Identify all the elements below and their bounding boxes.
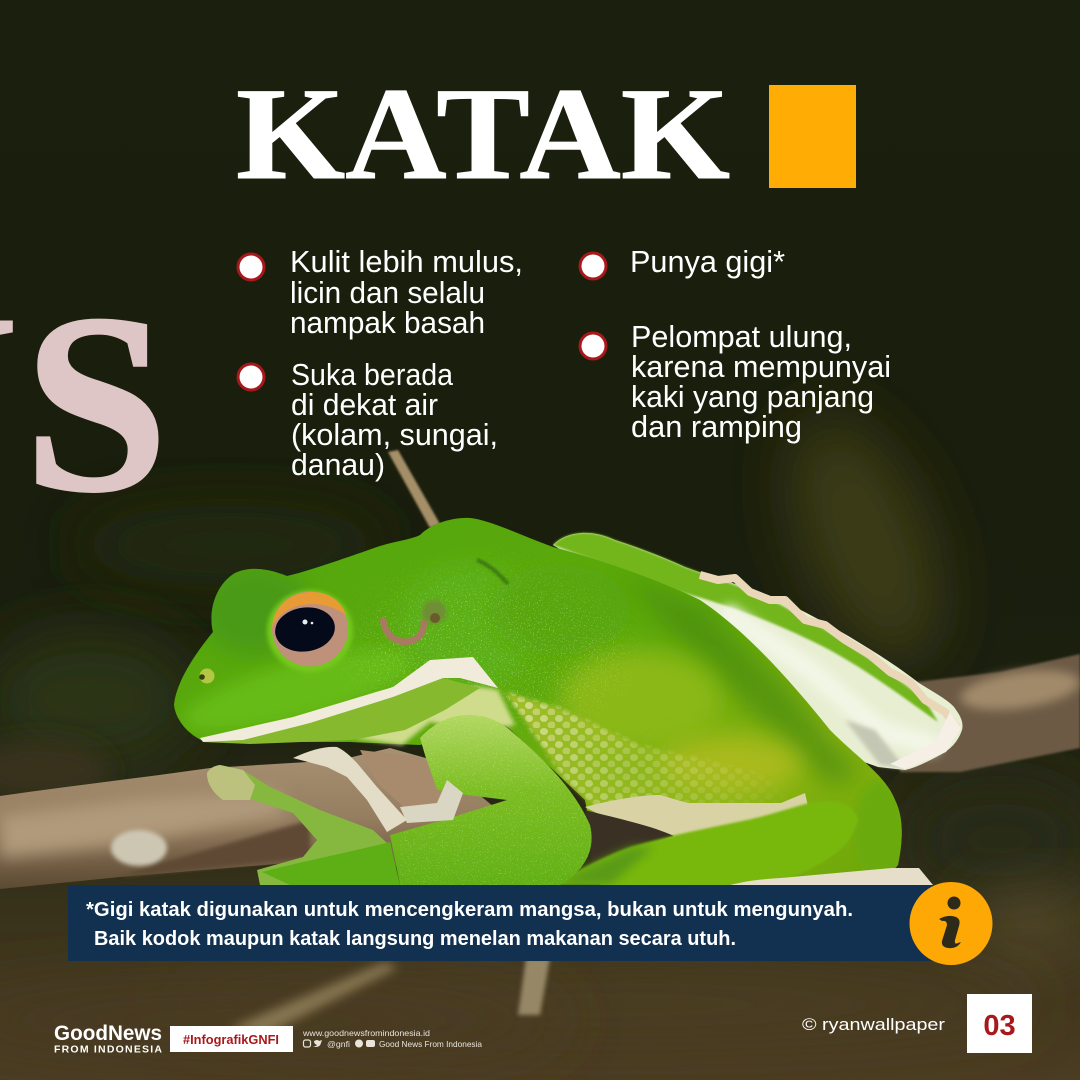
bullet: habitat xyxy=(238,357,498,482)
social links: www.goodnewsfromindonesia.id xyxy=(302,1028,430,1038)
hind thigh xyxy=(550,802,858,885)
bullet: pelompat: karena mempunyai xyxy=(631,349,891,384)
photo credit: © ryanwallpaper xyxy=(802,1016,946,1034)
body shading xyxy=(177,565,906,880)
bark under chin xyxy=(360,750,447,810)
bullet: pelompat: Pelompat ulung, xyxy=(631,319,852,354)
twig behind frog xyxy=(388,450,440,528)
hashtag xyxy=(170,1026,293,1052)
bullet: kulit xyxy=(238,244,523,340)
rear foot xyxy=(730,868,933,885)
social links xyxy=(302,1028,482,1049)
nostril xyxy=(199,668,214,684)
hind leg with pale fringe xyxy=(553,533,963,770)
flank scales xyxy=(504,690,772,805)
chest xyxy=(352,687,515,745)
tympanum xyxy=(383,618,424,642)
upper arm xyxy=(390,715,592,885)
right branch xyxy=(900,654,1080,772)
page number: 03 xyxy=(983,1010,1016,1042)
eye xyxy=(267,590,353,672)
main body and head xyxy=(174,518,902,885)
skin bump xyxy=(422,600,446,624)
social links: Good News From Indonesia xyxy=(379,1039,482,1049)
bullet: gigi: Punya gigi* xyxy=(630,244,785,279)
bullet: kulit: licin dan selalu xyxy=(290,275,485,310)
info bar xyxy=(68,885,933,961)
info bar: *Gigi katak digunakan untuk mencengkeram mangsa, bukan untuk mengunyah. xyxy=(86,898,853,921)
frog xyxy=(174,500,963,885)
logo xyxy=(54,1022,162,1056)
crease on back xyxy=(477,560,508,584)
thumb pale xyxy=(400,780,463,823)
arm skin glints xyxy=(400,710,595,885)
social links: @gnfi xyxy=(327,1039,350,1049)
skin glints xyxy=(334,546,650,748)
bullet: habitat: (kolam, sungai, xyxy=(291,417,498,452)
bullet: habitat: Suka berada xyxy=(291,357,454,392)
dark gap under belly xyxy=(585,810,674,866)
bullet: pelompat: kaki yang panjang xyxy=(631,379,874,414)
lower jaw xyxy=(203,678,480,744)
icon: info xyxy=(910,882,992,965)
bullet: habitat: di dekat air xyxy=(291,387,438,422)
decorative letters: S xyxy=(24,263,168,545)
bullet: kulit: nampak basah xyxy=(290,305,485,340)
bullet: habitat: danau) xyxy=(291,447,385,482)
logo: GoodNews xyxy=(54,1022,162,1045)
bullet: pelompat: dan ramping xyxy=(631,409,802,444)
title: KATAK xyxy=(236,60,730,207)
mouth stripe xyxy=(200,657,498,742)
left branch xyxy=(0,748,500,889)
pale belly xyxy=(585,793,810,840)
hashtag: #InfografikGNFI xyxy=(183,1032,279,1047)
forefoot fingers xyxy=(207,747,407,885)
title accent square xyxy=(769,85,856,188)
bullet: pelompat xyxy=(580,319,891,444)
logo: FROM INDONESIA xyxy=(54,1044,162,1056)
bullet: kulit: Kulit lebih mulus, xyxy=(290,244,523,279)
page number xyxy=(967,994,1032,1053)
info bar: Baik kodok maupun katak langsung menelan makanan secara utuh. xyxy=(94,927,736,950)
